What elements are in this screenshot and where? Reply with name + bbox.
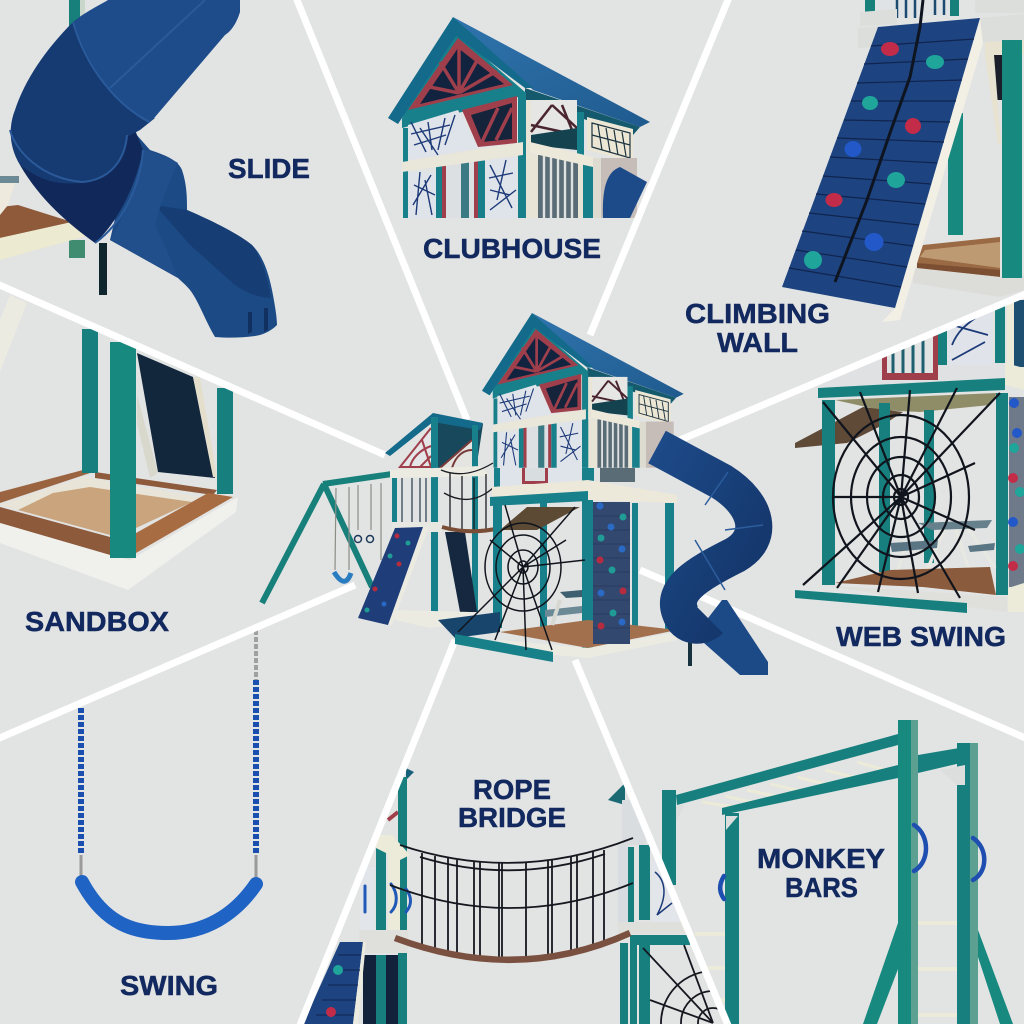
slide flange ridges: [10, 0, 205, 243]
central spider web net: [458, 505, 585, 650]
upper deck: [818, 300, 1024, 398]
label: climbing wall: [686, 304, 828, 352]
left tower: [303, 768, 414, 1024]
under-deck planks: [500, 507, 580, 530]
panel: rope bridge: [304, 768, 718, 1024]
tower house: [482, 313, 684, 468]
blue handles: [720, 825, 984, 899]
monkey bar rungs: [702, 762, 892, 807]
label: monkey bars: MONKEY: [757, 843, 885, 874]
bridge ropes: [390, 838, 633, 958]
label: monkey bars: BARS: [785, 872, 858, 903]
label: clubhouse: CLUBHOUSE: [423, 233, 601, 264]
tower posts: [493, 500, 674, 648]
label: slide: SLIDE: [228, 153, 310, 184]
panel: central playset: [262, 313, 768, 675]
label: sandbox: SANDBOX: [25, 606, 169, 637]
right chain: [254, 630, 258, 880]
slide upper tube: [73, 0, 240, 123]
bridge deck: [395, 933, 630, 960]
panel: swing: [81, 630, 256, 1001]
wall with holds: [593, 502, 630, 644]
central spiral slide: [657, 447, 768, 675]
panel: web swing: [795, 300, 1024, 652]
clubhouse building: [388, 17, 650, 218]
label: climbing wall: WALL: [717, 327, 798, 358]
corner of wall: [0, 295, 27, 372]
rear posts: [662, 743, 978, 1024]
wood under-deck: [795, 407, 903, 448]
panel: clubhouse: [388, 17, 650, 264]
label: rope bridge: ROPE: [473, 774, 551, 805]
small climbing wall: [358, 527, 429, 625]
slide middle tube: [11, 22, 155, 183]
climbing holds: [804, 42, 944, 269]
slide lower tube: [20, 130, 143, 243]
sandbox posts: [82, 329, 233, 558]
tower frame: [858, 0, 1024, 297]
panel: sandbox: [0, 295, 238, 637]
picnic table: [545, 590, 582, 625]
deck floor: [795, 567, 1024, 613]
partial web net: [642, 944, 718, 1024]
olive under-deck: [835, 393, 997, 412]
ladder rungs: [695, 923, 967, 1015]
right tower: [608, 783, 695, 1024]
panel: monkey bars: [662, 720, 1013, 1024]
frame posts: [822, 393, 1008, 595]
deck base: [438, 612, 677, 662]
lower house wall and floor: [490, 468, 677, 506]
label: swing: SWING: [120, 970, 218, 1001]
deck beside slide: [0, 0, 90, 260]
climbing wall planks: [782, 18, 983, 322]
diagonal braces: [863, 923, 1013, 1024]
rope bridge handles: [365, 884, 410, 912]
label: web swing: WEB SWING: [836, 621, 1006, 652]
black rope: [835, 0, 923, 282]
top rails: [676, 734, 965, 830]
left chain: [78, 708, 84, 880]
sandbox frame: [0, 353, 238, 590]
central rope bridge: [441, 463, 500, 532]
left tower: [385, 413, 490, 628]
panel: climbing wall: [685, 0, 1024, 358]
front post: [898, 720, 918, 1024]
label: rope bridge: BRIDGE: [458, 802, 566, 833]
label: climbing wall: CLIMBING: [685, 298, 830, 329]
panel: slide: [0, 0, 310, 338]
picnic table: [890, 520, 996, 568]
label: monkey bars: [757, 843, 885, 903]
swing set A-frame: [262, 474, 392, 603]
spider web net: [803, 388, 1000, 598]
clubhouse slide tube: [603, 167, 647, 218]
label: rope bridge: [460, 780, 566, 828]
swing seat: [82, 882, 256, 933]
slide chute: [99, 133, 277, 338]
side climbing wall: [1008, 397, 1024, 587]
